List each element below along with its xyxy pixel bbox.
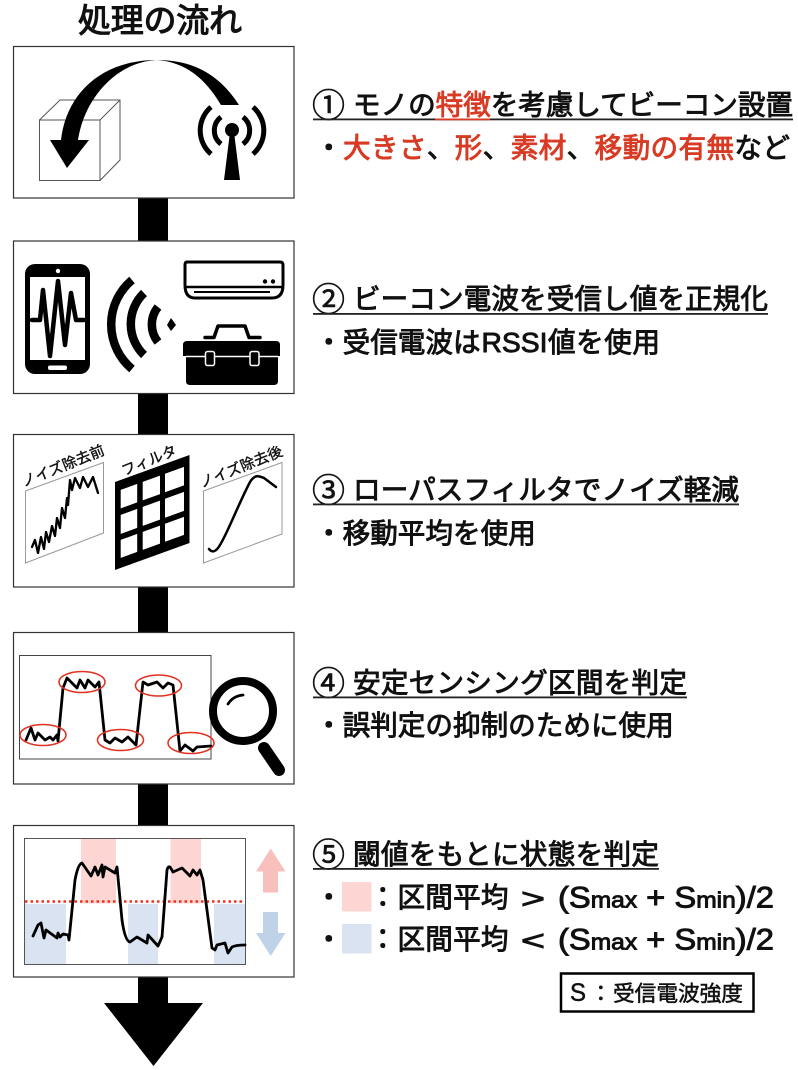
heading: step 2: ビーコン電波を受信し値を正規化 <box>353 284 768 314</box>
chart: after noise removal: ノイズ除去後 <box>197 443 286 492</box>
chart: after noise removal <box>197 443 286 563</box>
heading: step 2: ② <box>312 281 345 318</box>
icon: smartphone with signal <box>25 264 90 374</box>
panel: step 5 illustration <box>14 826 294 977</box>
text: step 2 detail: 値を使用 <box>548 327 660 358</box>
highlight: stable interval ellipses <box>20 672 214 754</box>
text: condition above threshold <box>315 882 774 914</box>
text: condition below threshold: ： <box>369 924 397 955</box>
text: condition below threshold: ・ <box>315 924 343 955</box>
chart: before noise removal <box>19 442 107 563</box>
text: step 3 detail: ・移動平均を使用 <box>315 518 536 549</box>
panel: step 2 illustration <box>14 241 294 394</box>
icon: filter grid <box>115 442 190 570</box>
chart: stable sensing intervals <box>20 656 214 759</box>
heading: step 3: ③ <box>312 472 345 509</box>
heading: step 5: ⑤ <box>312 836 345 874</box>
icon: magnifying glass <box>213 681 279 770</box>
text: step 2 detail: RSSI <box>482 327 548 358</box>
text: condition above threshold: ： <box>369 882 397 913</box>
text: condition above threshold: (Smax + Smin)/2 <box>558 882 774 914</box>
icon: filter grid: フィルタ <box>119 442 179 480</box>
text: condition below threshold <box>315 924 774 956</box>
text: condition below threshold: < <box>521 925 545 956</box>
text: step 4 detail: ・誤判定の抑制のために使用 <box>315 710 674 741</box>
arrow: beacon to object <box>50 60 239 168</box>
icon: radio waves <box>111 280 176 369</box>
legend: S definition: 受信電波強度 <box>613 981 743 1006</box>
chart: before noise removal: ノイズ除去前 <box>19 442 107 491</box>
heading: step 1: モノの特徴を考慮してビーコン設置 <box>353 90 793 120</box>
text: condition above threshold: > <box>521 883 545 914</box>
icon: up arrow <box>256 848 286 892</box>
title: 処理の流れ <box>78 2 242 39</box>
text: condition below threshold: 区間平均 <box>398 924 508 955</box>
text: condition above threshold: 区間平均 <box>398 882 508 913</box>
heading: step 5: 閾値をもとに状態を判定 <box>353 839 659 870</box>
text: condition below threshold: (Smax + Smin)/2 <box>558 924 774 956</box>
text: step 2 detail <box>315 327 660 358</box>
panel: step 3 illustration <box>14 434 294 587</box>
icon: beacon antenna <box>200 107 264 180</box>
text: step 2 detail: ・受信電波は <box>315 327 481 358</box>
chart: threshold judgement <box>24 838 246 964</box>
panel: step 4 illustration <box>14 632 294 784</box>
heading: step 3: ローパスフィルタでノイズ軽減 <box>353 474 739 506</box>
legend: S definition <box>561 974 754 1012</box>
heading: step 4: 安定センシング区間を判定 <box>353 668 687 698</box>
icon: toolbox <box>183 326 280 385</box>
legend: S definition: ： <box>590 981 612 1006</box>
panel: step 1 illustration <box>14 46 294 198</box>
heading: step 1: ① <box>312 87 345 124</box>
arrow: main flow <box>104 198 203 1066</box>
icon: down arrow <box>256 912 286 956</box>
text: condition above threshold: ・ <box>315 882 343 913</box>
heading: step 4: ④ <box>312 665 345 702</box>
text: step 1 detail: ・大きさ、形、素材、移動の有無など <box>315 132 790 164</box>
icon: air conditioner <box>185 262 283 298</box>
icon: cube <box>40 100 120 180</box>
legend: S definition: S <box>570 979 586 1007</box>
